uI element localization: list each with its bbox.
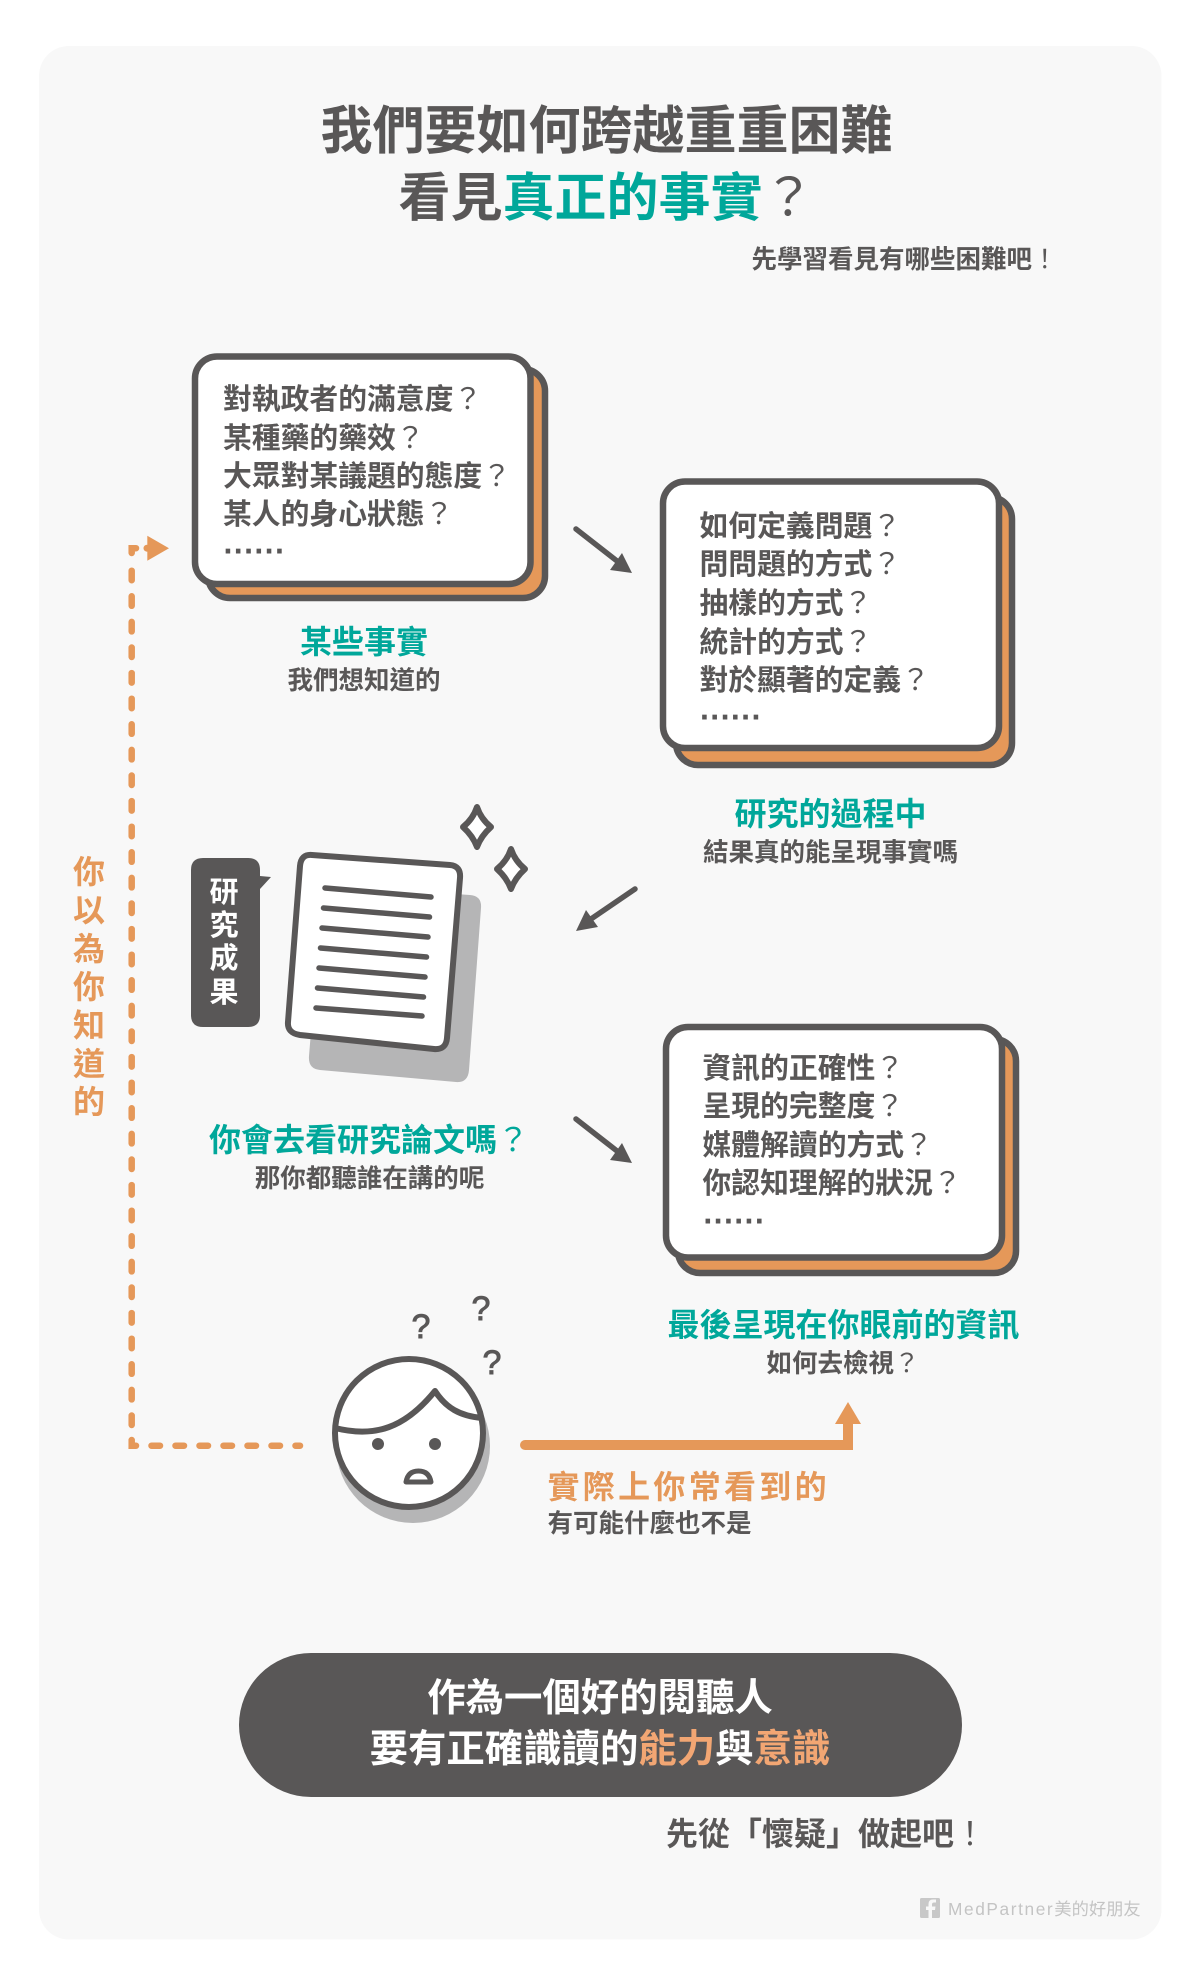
panel: research process: 統計的方式？ — [700, 627, 872, 659]
title: 我們要如何跨越重重困難 — [320, 103, 893, 161]
icon: question marks: ? — [472, 1290, 490, 1328]
caption: some facts: 我們想知道的 — [287, 667, 441, 695]
brand footer: MedPartner美的好朋友 — [948, 1899, 1141, 1919]
panel: some facts — [195, 356, 545, 598]
caption: research process: 研究的過程中 — [734, 796, 927, 832]
arrow: dashed orange loop — [132, 536, 300, 1446]
speech bubble: research result: 研 — [209, 877, 239, 909]
closing text: 先從「懷疑」做起吧！ — [666, 1816, 986, 1852]
icon: confused face — [335, 1359, 490, 1523]
panel: final information: ...... — [703, 1194, 765, 1230]
panel: research process: ...... — [700, 690, 762, 726]
icon: facebook — [920, 1898, 940, 1918]
label: what you think you know: 為 — [73, 931, 105, 967]
caption: research paper — [209, 1122, 529, 1193]
icon: sparkles — [463, 807, 525, 889]
panel: some facts: 某人的身心狀態？ — [223, 499, 453, 531]
panel: final information: 你認知理解的狀況？ — [702, 1168, 962, 1200]
speech bubble: research result: 究 — [209, 909, 239, 942]
label: what you think you know: 以 — [73, 892, 105, 928]
label: what you think you know — [73, 854, 105, 1120]
panel: some facts: ...... — [224, 524, 285, 560]
caption: final information: 如何去檢視？ — [766, 1349, 920, 1378]
icon: question marks: ? — [483, 1344, 501, 1382]
subtitle: 先學習看見有哪些困難吧！ — [752, 246, 1058, 274]
title — [320, 103, 893, 228]
caption: what you actually see — [548, 1469, 830, 1538]
paper shadow — [309, 885, 481, 1082]
panel: some facts: 對執政者的滿意度？ — [223, 384, 482, 416]
panel: research process: 如何定義問題？ — [700, 511, 901, 543]
panel: research process — [663, 482, 1012, 765]
speech bubble: research result: 成 — [209, 942, 239, 975]
panel: final information: 呈現的完整度？ — [702, 1091, 904, 1123]
speech bubble: research result: 果 — [209, 977, 239, 1009]
caption: research process — [703, 796, 958, 867]
title: 看見真正的事實？ — [398, 170, 815, 228]
panel: final information: 媒體解讀的方式？ — [702, 1130, 933, 1162]
caption: research process: 結果真的能呈現事實嗎 — [703, 839, 958, 867]
caption: some facts — [287, 624, 441, 695]
arrow: solid orange up — [525, 1402, 861, 1445]
label: what you think you know: 你 — [73, 854, 105, 890]
arrow: result to media — [576, 1119, 632, 1163]
conclusion pill: 要有正確識讀的能力與意識 — [370, 1728, 830, 1771]
panel: research process: 抽樣的方式？ — [700, 588, 872, 620]
panel: some facts: 大眾對某議題的態度？ — [223, 461, 511, 493]
label: what you think you know: 知 — [73, 1008, 105, 1044]
arrow: facts to research — [576, 529, 632, 573]
caption: research paper: 你會去看研究論文嗎？ — [209, 1122, 529, 1158]
panel: research process: 對於顯著的定義？ — [700, 665, 930, 697]
panel: some facts: 某種藥的藥效？ — [223, 423, 425, 455]
arrow: process to result — [576, 889, 635, 931]
caption: what you actually see: 有可能什麼也不是 — [548, 1510, 752, 1538]
caption: final information: 最後呈現在你眼前的資訊 — [667, 1307, 1020, 1343]
panel: research process: 問問題的方式？ — [700, 549, 901, 581]
conclusion pill — [239, 1653, 962, 1797]
conclusion pill: 作為一個好的閱聽人 — [427, 1677, 773, 1720]
caption: research paper: 那你都聽誰在講的呢 — [255, 1165, 484, 1193]
caption: what you actually see: 實際上你常看到的 — [548, 1469, 830, 1505]
icon: question marks: ? — [412, 1308, 430, 1346]
label: what you think you know: 的 — [73, 1084, 105, 1120]
caption: some facts: 某些事實 — [300, 624, 428, 660]
panel: final information — [666, 1027, 1016, 1273]
paper sheet — [288, 855, 460, 1049]
label: what you think you know: 你 — [73, 969, 105, 1005]
illustration: research paper — [288, 855, 481, 1082]
speech bubble: research result — [191, 858, 271, 1027]
icon: question marks — [412, 1290, 501, 1382]
panel: final information: 資訊的正確性？ — [702, 1053, 904, 1085]
label: what you think you know: 道 — [73, 1046, 105, 1082]
caption: final information — [667, 1307, 1020, 1378]
